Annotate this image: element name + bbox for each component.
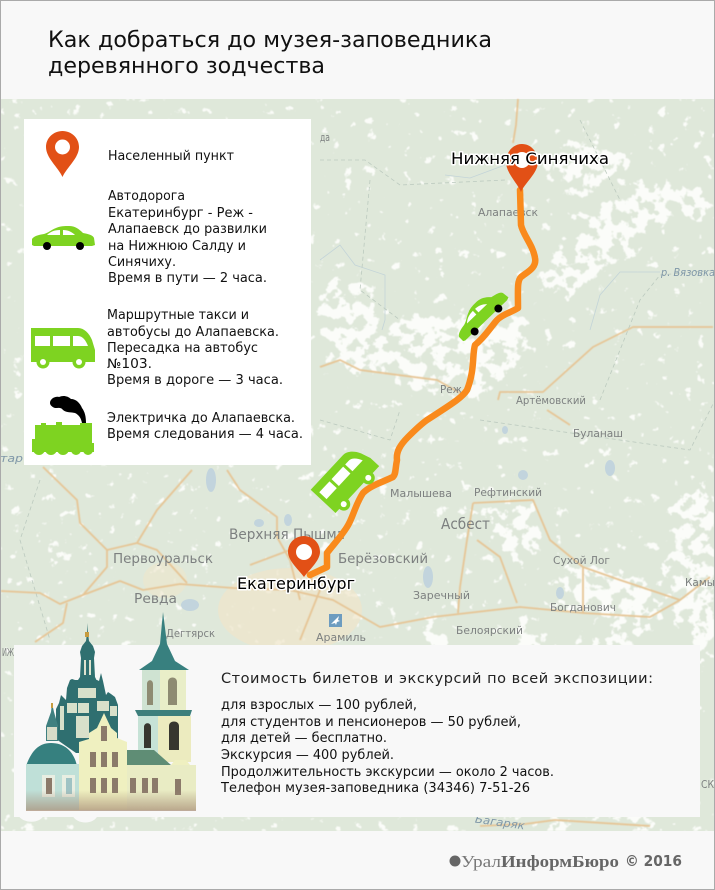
map: Revda area — [143, 562, 187, 598]
yellow facade — [79, 713, 127, 810]
map: place labels: Белоярский — [456, 624, 523, 637]
prices text: Экскурсия — 400 рублей. — [221, 748, 394, 763]
map: place labels: Сухой Лог — [553, 554, 610, 567]
map: place labels: Верхняя Пышма — [229, 527, 345, 543]
legend text: train: Электричка до Алапаевска. — [107, 411, 295, 426]
central spire and dome — [76, 623, 98, 685]
prices text: для взрослых — 100 рублей, — [221, 698, 417, 713]
map: district borders — [20, 120, 715, 640]
icon: settlement pin — [46, 131, 79, 177]
legend text: road: Алапаевск до развилки — [108, 222, 267, 237]
panel: ticket prices — [14, 612, 700, 817]
pin: Nizhnyaya Sinyachikha — [506, 144, 538, 192]
icon: train — [32, 396, 94, 455]
panel heading: Стоимость билетов и экскурсий по всей экспозиции: — [221, 671, 653, 687]
legend text: road — [108, 189, 267, 286]
map: place labels: тар — [0, 452, 23, 465]
footer logo — [450, 852, 682, 871]
bell lower tier — [138, 716, 191, 762]
title: деревянного зодчества — [48, 54, 325, 79]
trees — [26, 790, 196, 811]
prices text: Телефон музея-заповедника (34346) 7-51-26 — [220, 781, 530, 796]
map: place labels: Буланаш — [573, 427, 623, 440]
legend text: road: Синячиху. — [108, 255, 176, 270]
pin: Ekaterinburg — [288, 536, 320, 577]
map: place labels: Реж — [440, 383, 462, 396]
legend text: bus: Время в дороге — 3 часа. — [107, 373, 283, 388]
bell windows — [147, 678, 177, 705]
prices text: Продолжительность экскурсии — около 2 часов. — [221, 765, 554, 780]
map: place labels: Берёзовский — [338, 552, 428, 567]
cluster light walls — [60, 688, 117, 738]
footer logo: ИнформБюро — [501, 852, 619, 871]
bell cornice — [135, 710, 192, 716]
map: place labels: Арамиль — [316, 631, 366, 644]
bell upper tier — [142, 670, 186, 711]
map: place labels: Дегтярск — [166, 627, 215, 640]
label: Nizhnyaya Sinyachikha: Нижняя Синячиха — [451, 149, 609, 168]
label: Ekaterinburg: Екатеринбург — [237, 574, 355, 593]
icon: car on map — [450, 284, 512, 345]
map: white clearings — [48, 137, 715, 838]
map: place labels: Асбест — [441, 515, 490, 533]
legend text: road: Автодорога — [108, 189, 185, 204]
map: place labels: Рефтинский — [474, 486, 542, 499]
green roof — [127, 750, 171, 765]
dome cluster mass — [56, 673, 120, 753]
legend text: road: Время в пути — 2 часа. — [108, 271, 267, 286]
map: lakes — [181, 426, 615, 611]
map: place labels: Багаряк — [474, 813, 526, 832]
legend text: train — [107, 411, 303, 442]
legend text: bus: автобусы до Алапаевска. — [107, 325, 279, 340]
map: place labels: Богданович — [550, 601, 616, 614]
legend text: bus: №103. — [107, 357, 152, 372]
small left tower — [46, 703, 58, 741]
legend text: settlement: Населенный пункт — [108, 149, 234, 164]
map: place labels: Первоуральск — [113, 552, 213, 567]
icon: bus — [31, 328, 95, 368]
wall window frames — [42, 775, 55, 797]
map: place labels: Малышева — [390, 487, 452, 500]
panel: legend — [24, 119, 311, 465]
bell spire — [139, 612, 189, 670]
map: place labels: Ревда — [134, 592, 177, 607]
map: place labels: ИЖ — [2, 646, 14, 659]
map: place labels: да — [320, 131, 330, 144]
icon: airport — [329, 614, 342, 627]
legend text: bus: Пересадка на автобус — [107, 341, 258, 356]
legend text: bus: Маршрутные такси и — [107, 308, 249, 323]
legend text: train: Время следования — 4 часа. — [107, 427, 303, 442]
title: Как добраться до музея-заповедника — [48, 28, 492, 53]
footer logo: © 2016 — [625, 852, 682, 870]
church image — [26, 612, 196, 811]
map: place labels — [0, 131, 715, 832]
map: city area — [218, 568, 362, 652]
map: place labels: Алапаевск — [478, 206, 538, 219]
wing gable — [171, 760, 190, 765]
windows — [46, 726, 181, 795]
left dome — [26, 743, 77, 766]
map: place labels: Артёмовский — [516, 394, 586, 407]
title — [48, 28, 492, 79]
prices text: для студентов и пенсионеров — 50 рублей, — [221, 715, 521, 730]
white bumps below panel — [18, 815, 98, 822]
legend text: road: на Нижнюю Салду и — [108, 239, 246, 254]
route line — [310, 190, 535, 575]
right wing — [127, 765, 196, 810]
prices text: для детей — бесплатно. — [221, 731, 387, 746]
prices text — [220, 698, 554, 796]
icon: car — [32, 226, 95, 250]
icon: bus on map — [311, 443, 384, 517]
map: rivers — [320, 165, 660, 330]
map: place labels: Заречный — [413, 589, 470, 602]
footer logo: Урал — [461, 852, 502, 871]
legend text: bus — [107, 308, 283, 388]
left wall — [26, 764, 80, 810]
legend text: road: Екатеринбург - Реж - — [108, 206, 253, 221]
